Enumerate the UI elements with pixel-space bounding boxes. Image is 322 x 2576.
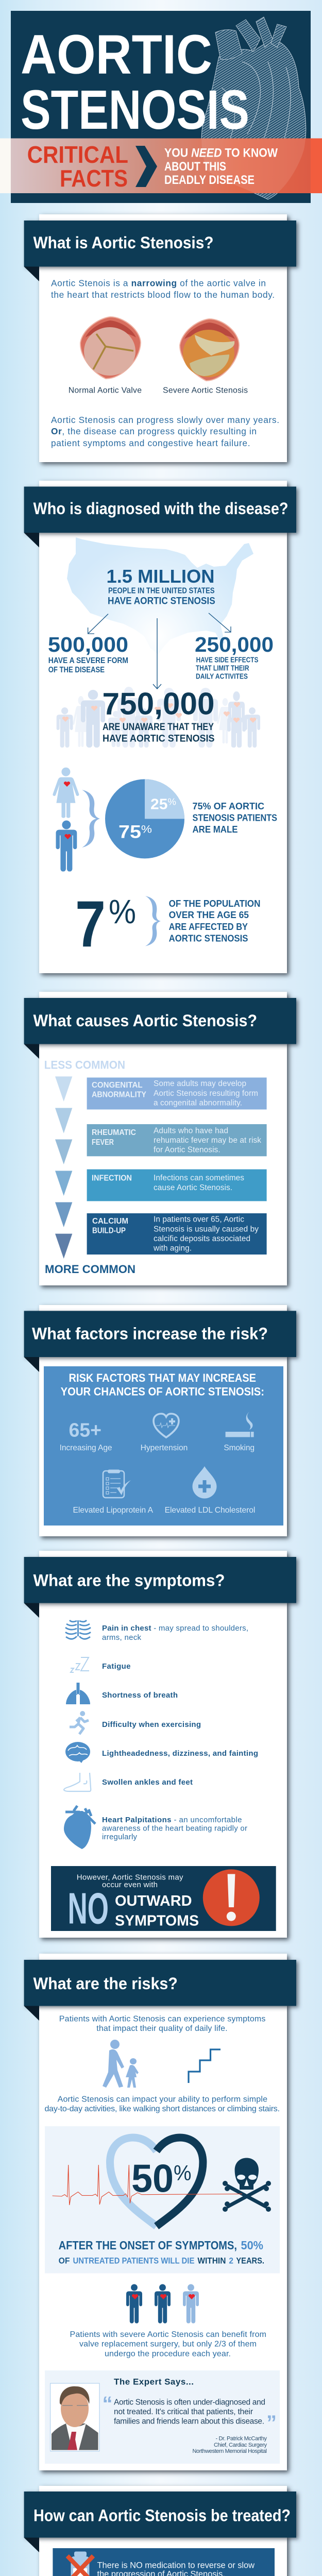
- subheading: YOU NEED TO KNOW: [164, 146, 278, 160]
- quotation marks: “: [102, 2393, 112, 2415]
- photo: Dr. McCarthy: [50, 2383, 99, 2451]
- medication box: There is NO medication to reverse or slow: [97, 2561, 255, 2570]
- callout: no outward symptoms: However, Aortic Stenosis may: [77, 1873, 183, 1882]
- cause: infection: [87, 1170, 267, 1201]
- arrow: to side effects: [209, 613, 231, 632]
- quote: families and friends learn about this disease.: [114, 2417, 264, 2426]
- stat: 50 percent: 50: [131, 2157, 174, 2201]
- intro text: Aortic Stenois is a narrowing of the aortic valve in: [51, 278, 266, 289]
- factor: smoking: Smoking: [224, 1444, 255, 1452]
- factor: hypertension: Hypertension: [141, 1444, 188, 1452]
- callout: no outward symptoms: NO: [68, 1885, 109, 1933]
- cause: congenital abnormality: a congenital abnormality.: [154, 1098, 242, 1107]
- illustration: United States map: [67, 537, 253, 654]
- stat: 1.5 million: [106, 566, 215, 607]
- stat: 500,000: OF THE DISEASE: [48, 666, 105, 674]
- subheading: [164, 146, 278, 187]
- text: percent male: ARE MALE: [193, 824, 238, 835]
- cause: calcium build-up: In patients over 65, Aortic: [154, 1215, 244, 1224]
- critical facts band: [0, 138, 322, 193]
- cause: calcium build-up: calcific deposits associated: [154, 1234, 250, 1243]
- chart: pie male vs female: [105, 779, 184, 858]
- symptom: chest pain: arms, neck: [102, 1633, 141, 1642]
- panel: what factors increase the risk: [24, 1305, 296, 1536]
- cause: infection: cause Aortic Stenosis.: [154, 1183, 232, 1192]
- stat: 7 percent: %: [109, 892, 136, 930]
- header banner: [0, 11, 322, 203]
- chart: pie male vs female: %: [167, 796, 176, 807]
- panel: what are the risks: [24, 1954, 296, 2470]
- cause: rheumatic fever: rehumatic fever may be at risk: [154, 1136, 261, 1145]
- chart: pie male vs female: 25: [150, 796, 167, 812]
- caption: severe stenosis: Severe Aortic Stenosis: [163, 386, 248, 395]
- cause: infection: Infections can sometimes: [154, 1174, 244, 1182]
- factor: lipoprotein: [73, 1469, 154, 1515]
- symptom: difficulty exercising: [70, 1711, 201, 1734]
- factor: age: 65+: [69, 1420, 101, 1442]
- attribution: [193, 2436, 267, 2454]
- stat: 750,000: HAVE AORTIC STENOSIS: [103, 734, 214, 744]
- ribbon heading: What is Aortic Stenosis?: [33, 233, 213, 252]
- ribbon heading: [24, 221, 296, 281]
- callout: 50 percent mortality: [45, 2126, 280, 2273]
- text: two thirds get surgery: Patients with severe Aortic Stenosis can benefit from: [70, 2330, 266, 2339]
- text: population over 65: ARE AFFECTED BY: [169, 921, 248, 932]
- symptom: shortness of breath: [66, 1683, 178, 1704]
- chart: pie male vs female: 75: [118, 822, 139, 842]
- icon: crossed out pill bottle: [67, 2551, 93, 2576]
- icon: three patients: [126, 2284, 199, 2324]
- medication box: [53, 2548, 275, 2576]
- stat: 750,000: ARE UNAWARE THAT THEY: [103, 722, 214, 733]
- title: Stenosis: STENOSIS: [21, 78, 249, 141]
- ribbon heading: [24, 1960, 296, 2021]
- cause: calcium build-up: Stenosis is usually caused by: [154, 1225, 259, 1233]
- heading: critical facts: [27, 141, 128, 192]
- subheading: ABOUT THIS: [164, 160, 226, 174]
- text: two thirds get surgery: undergo the procedure each year.: [105, 2350, 231, 2359]
- factor: age: Increasing Age: [60, 1444, 112, 1452]
- ribbon heading: [24, 1311, 296, 1372]
- cause: infection: INFECTION: [92, 1174, 132, 1183]
- text: two thirds get surgery: [70, 2330, 266, 2359]
- stat: 250,000: THAT LIMIT THEIR: [196, 664, 249, 672]
- activities text: [44, 2095, 280, 2113]
- symptom: lightheadedness: [65, 1742, 258, 1763]
- icon: exclamation: [203, 1869, 260, 1926]
- panel: who is diagnosed: [24, 481, 296, 973]
- symptom: difficulty exercising: Difficulty when exercising: [102, 1720, 201, 1729]
- symptom: lightheadedness: Lightheadedness, dizziness, and fainting: [102, 1749, 258, 1758]
- symptom: heart palpitations: awareness of the heart beating rapidly or: [102, 1824, 247, 1833]
- stat: 1.5 million: PEOPLE IN THE UNITED STATES: [108, 587, 215, 596]
- illustration: normal aortic valve: [80, 317, 141, 379]
- factor: hypertension: [141, 1414, 188, 1452]
- symptom: fatigue: [71, 1657, 131, 1672]
- text: onset of symptoms: OF: [59, 2256, 70, 2266]
- attribution: Chief, Cardiac Surgery: [214, 2442, 267, 2448]
- ribbon heading: [24, 2492, 296, 2552]
- stat: 1.5 million: HAVE AORTIC STENOSIS: [108, 596, 215, 607]
- cause: rheumatic fever: RHEUMATIC: [92, 1128, 136, 1137]
- cause: congenital abnormality: ABNORMALITY: [92, 1090, 147, 1099]
- cause: congenital abnormality: Some adults may develop: [154, 1079, 246, 1088]
- text: percent male: 75% OF AORTIC: [193, 801, 264, 811]
- factor: LDL cholesterol: Elevated LDL Cholesterol: [165, 1506, 255, 1515]
- factor: age: [60, 1420, 112, 1452]
- arrow: to unaware: [153, 618, 161, 689]
- panel: how can aortic stenosis be treated: [24, 2486, 296, 2576]
- stat: 250,000: DAILY ACTIVITES: [196, 672, 248, 681]
- callout: expert quote: [45, 2370, 280, 2464]
- text: percent male: STENOSIS PATIENTS: [193, 812, 277, 823]
- progression text: Aortic Stenosis can progress slowly over many years.: [51, 415, 279, 425]
- cause: congenital abnormality: CONGENITAL: [92, 1081, 143, 1090]
- symptom: swollen ankles: Swollen ankles and feet: [102, 1778, 193, 1787]
- icon: woman: [53, 768, 79, 818]
- symptom: chest pain: [65, 1620, 248, 1642]
- progression text: Or, the disease can progress quickly resulting in: [51, 426, 257, 436]
- activities text: day-to-day activities, like walking short distances or climbing stairs.: [44, 2105, 280, 2113]
- quote: not treated. It's critical that patients, their: [114, 2408, 253, 2416]
- heading: RISK FACTORS THAT MAY INCREASE: [69, 1371, 256, 1384]
- cause: rheumatic fever: for Aortic Stenosis.: [154, 1146, 221, 1155]
- callout: no outward symptoms: occur even with: [102, 1880, 158, 1889]
- stat: 500,000: [48, 633, 128, 674]
- text: two thirds get surgery: valve replacement surgery, but only 2/3 of them: [79, 2340, 257, 2349]
- panel: what are the symptoms: [24, 1551, 296, 1938]
- panel: what causes aortic stenosis: [24, 992, 296, 1285]
- cause: congenital abnormality: Aortic Stenosis resulting form: [154, 1089, 258, 1098]
- text: population over 65: AORTIC STENOSIS: [169, 933, 248, 944]
- callout: no outward symptoms: SYMPTOMS: [115, 1913, 199, 1929]
- text: onset of symptoms: 2: [229, 2256, 233, 2266]
- stat: 500,000: HAVE A SEVERE FORM: [48, 656, 128, 665]
- chart: pie male vs female: %: [141, 823, 152, 835]
- stat: 7 percent: 7: [75, 887, 106, 960]
- stat: 250,000: [195, 633, 274, 681]
- icon: stairs: [189, 2049, 221, 2083]
- intro text: [51, 278, 275, 300]
- chart: ECG line: [53, 2165, 242, 2205]
- symptom: swollen ankles: [64, 1773, 193, 1791]
- illustration: engraved anatomical heart: [201, 17, 306, 199]
- label: less common: LESS COMMON: [44, 1059, 125, 1072]
- intro text: that impact their quality of daily life.: [96, 2024, 228, 2033]
- arrows: descending triangles: [55, 1076, 72, 1259]
- stat: 7 percent: [75, 887, 136, 960]
- illustration: crowd of people: [57, 687, 260, 748]
- icon: rib cage: [65, 1620, 91, 1639]
- text: onset of symptoms: UNTREATED PATIENTS WILL DIE: [73, 2256, 194, 2266]
- stat: 250,000: 250,000: [195, 633, 274, 656]
- cause: rheumatic fever: FEVER: [92, 1138, 114, 1147]
- ribbon heading: How can Aortic Stenosis be treated?: [33, 2506, 291, 2525]
- intro text: [59, 2014, 265, 2033]
- text: onset of symptoms: 50%: [241, 2239, 263, 2252]
- progression text: patient symptoms and congestive heart failure.: [51, 438, 250, 448]
- activities text: Aortic Stenosis can impact your ability to perform simple: [58, 2095, 267, 2104]
- ribbon heading: [24, 486, 296, 547]
- cause: rheumatic fever: Adults who have had: [154, 1126, 228, 1135]
- stat: 750,000: 750,000: [102, 686, 214, 721]
- attribution: - Dr. Patrick McCarthy: [215, 2436, 267, 2442]
- cause: calcium build-up: [87, 1213, 267, 1255]
- ribbon heading: What causes Aortic Stenosis?: [33, 1011, 257, 1030]
- text: percent male: [193, 801, 277, 835]
- icon: chevron: [135, 146, 157, 187]
- callout: no outward symptoms: OUTWARD: [115, 1893, 192, 1909]
- text: population over 65: OVER THE AGE 65: [169, 909, 249, 920]
- symptom: heart palpitations: [64, 1806, 247, 1849]
- icon: skull and crossbones: [223, 2158, 271, 2212]
- quotation marks: ”: [266, 2412, 277, 2434]
- factor: LDL cholesterol: [165, 1466, 255, 1515]
- icon: heart outline: [110, 2138, 203, 2226]
- panel: what is aortic stenosis: [24, 214, 296, 462]
- cause: congenital abnormality: [87, 1078, 267, 1110]
- caption: normal valve: Normal Aortic Valve: [69, 386, 142, 395]
- text: onset of symptoms: WITHIN: [197, 2256, 226, 2266]
- ribbon heading: What factors increase the risk?: [32, 1324, 268, 1343]
- text: onset of symptoms: [59, 2239, 264, 2266]
- text: population over 65: [169, 898, 260, 944]
- ribbon heading: Who is diagnosed with the disease?: [33, 499, 289, 518]
- brace: [145, 896, 161, 946]
- intro text: Patients with Aortic Stenosis can experience symptoms: [59, 2014, 265, 2023]
- label: more common: MORE COMMON: [45, 1263, 135, 1276]
- symptom: heart palpitations: Heart Palpitations - an uncomfortable: [102, 1816, 242, 1824]
- heading: critical facts: CRITICAL: [27, 141, 128, 168]
- brace: [82, 790, 100, 848]
- heading: YOUR CHANCES OF AORTIC STENOSIS:: [61, 1385, 264, 1398]
- icon: adult and child walking: [103, 2040, 139, 2088]
- illustration: severe aortic stenosis valve: [180, 319, 239, 381]
- heading: critical facts: FACTS: [60, 165, 128, 192]
- stat: 750,000: [102, 686, 214, 744]
- text: onset of symptoms: YEARS.: [236, 2256, 264, 2266]
- icon: man: [56, 820, 77, 872]
- stat: 1.5 million: 1.5 MILLION: [106, 566, 214, 587]
- cause: calcium build-up: with aging.: [153, 1244, 192, 1252]
- text: onset of symptoms: AFTER THE ONSET OF SYMPTOMS,: [59, 2239, 237, 2252]
- symptom: chest pain: Pain in chest - may spread to shoulders,: [102, 1624, 248, 1633]
- risk factors box: [44, 1366, 283, 1526]
- symptom: heart palpitations: irregularly: [102, 1833, 137, 1841]
- attribution: Northwestern Memorial Hospital: [193, 2448, 267, 2454]
- stat: 50 percent: %: [174, 2161, 192, 2185]
- factor: smoking: [224, 1412, 255, 1452]
- title: Aortic: AORTIC: [21, 23, 212, 86]
- progression text: [51, 415, 279, 448]
- quote: [114, 2398, 265, 2426]
- stat: 500,000: 500,000: [48, 633, 128, 656]
- subheading: DEADLY DISEASE: [164, 173, 255, 187]
- ribbon heading: What are the symptoms?: [33, 1571, 225, 1590]
- quote: Aortic Stenosis is often under-diagnosed and: [114, 2398, 265, 2407]
- symptom: fatigue: Fatigue: [102, 1662, 131, 1671]
- ribbon heading: What are the risks?: [33, 1974, 178, 1993]
- cause: calcium build-up: BUILD-UP: [92, 1226, 126, 1235]
- heading: The Expert Says...: [114, 2377, 194, 2386]
- intro text: the heart that restricts blood flow to the human body.: [51, 290, 275, 300]
- ribbon heading: [24, 1557, 296, 1618]
- ribbon heading: [24, 998, 296, 1059]
- factor: lipoprotein: Elevated Lipoprotein A: [73, 1506, 154, 1515]
- cause: rheumatic fever: [87, 1124, 267, 1156]
- stat: 250,000: HAVE SIDE EFFECTS: [196, 655, 258, 664]
- heading: [61, 1371, 264, 1398]
- arrow: to severe form: [88, 614, 108, 634]
- symptom: shortness of breath: Shortness of breath: [102, 1691, 178, 1700]
- text: population over 65: OF THE POPULATION: [169, 898, 260, 909]
- quotation marks: [102, 2393, 277, 2434]
- callout: no outward symptoms: [51, 1866, 276, 1933]
- cause: calcium build-up: CALCIUM: [92, 1217, 128, 1226]
